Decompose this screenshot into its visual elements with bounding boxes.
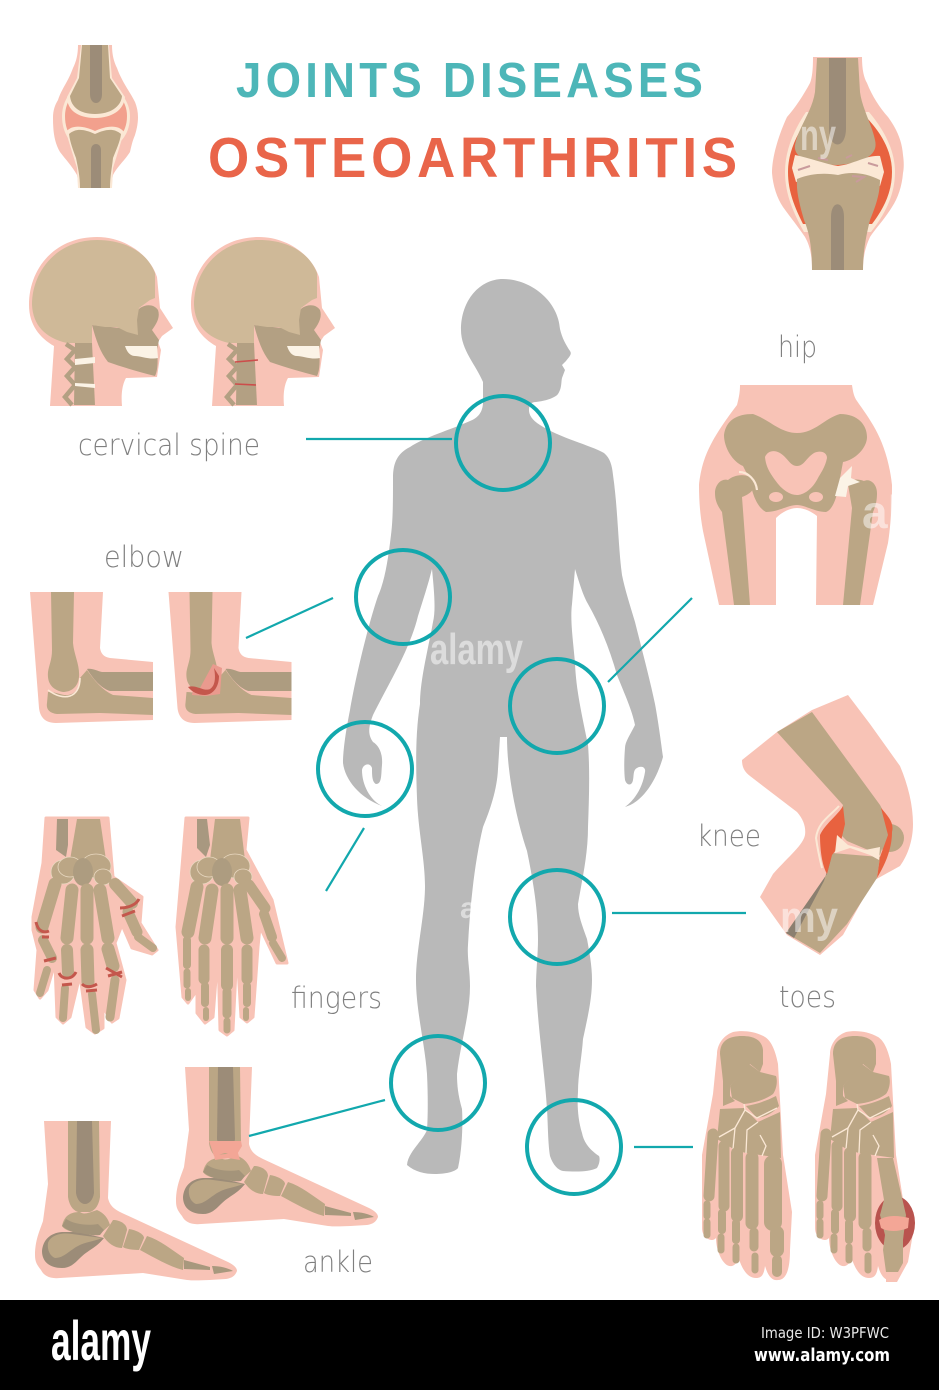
connector: hip	[608, 598, 692, 682]
ankle: healthy	[35, 1121, 237, 1280]
label: cervical spine: cervical spine	[78, 428, 260, 462]
label: elbow: elbow	[104, 540, 184, 574]
elbow: affected	[168, 592, 292, 723]
watermark overlays: al	[862, 486, 900, 538]
connector: fingers	[326, 828, 364, 891]
watermark overlays: a	[460, 892, 477, 925]
watermark overlays: alamy	[430, 625, 523, 674]
connector: knee	[612, 912, 746, 914]
watermark overlays: ny	[800, 111, 836, 160]
label: ankle: ankle	[303, 1245, 373, 1279]
title: joints diseases: JOINTS DISEASES	[236, 54, 703, 108]
watermark overlays	[430, 111, 900, 942]
ankle: affected	[176, 1067, 378, 1226]
label: toes: toes	[779, 980, 836, 1014]
hand: healthy	[177, 818, 287, 1035]
highlight ring: knee	[510, 870, 604, 964]
cervical spine: affected	[191, 237, 335, 406]
hand: affected	[33, 818, 157, 1033]
connector: toes	[634, 1146, 693, 1148]
image id: Image ID: W3PFWC	[761, 1324, 889, 1342]
footer bar	[0, 1300, 939, 1390]
hip illustration	[699, 385, 892, 605]
highlight ring: hip	[510, 659, 604, 753]
highlight ring: foot	[527, 1100, 621, 1194]
highlight ring: ankle	[391, 1036, 485, 1130]
osteoarthritic joint illustration	[772, 57, 904, 270]
label: fingers: fingers	[291, 981, 382, 1015]
foot: healthy	[702, 1031, 792, 1280]
healthy joint illustration	[53, 45, 138, 188]
highlight ring: neck	[456, 396, 550, 490]
watermark overlays: my	[780, 893, 838, 942]
foot: affected	[815, 1031, 915, 1282]
connector: neck to cervical spine	[306, 438, 452, 440]
website: www.alamy.com	[754, 1345, 890, 1366]
elbow: healthy	[30, 592, 153, 723]
highlight ring: elbow	[356, 550, 450, 644]
label: hip: hip	[778, 330, 817, 364]
connector: elbow	[246, 598, 333, 638]
human silhouette	[343, 279, 663, 1174]
title: osteoarthritis: OSTEOARTHRITIS	[208, 125, 737, 189]
footer logo: alamy	[51, 1309, 151, 1372]
highlight ring: hand	[318, 722, 412, 816]
label: knee: knee	[697, 819, 761, 853]
knee illustration	[742, 695, 913, 955]
connector: ankle	[249, 1100, 385, 1136]
cervical spine: healthy	[29, 237, 173, 406]
